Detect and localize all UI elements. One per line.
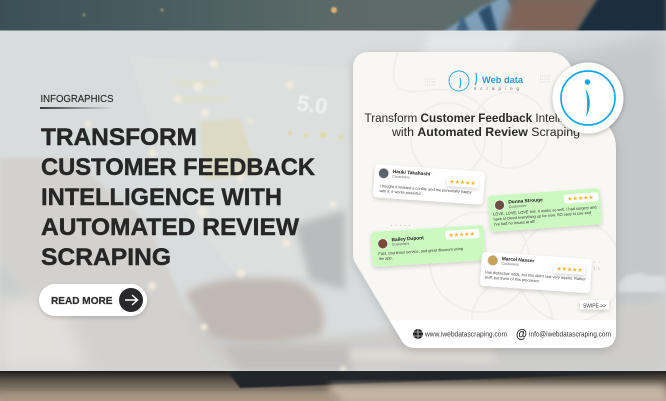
- screen: blurred rating and smiley: Satisfaction: [178, 94, 229, 104]
- review card: Haubi Takahashi: [373, 164, 485, 205]
- icon: arrow: [119, 288, 143, 312]
- review card: Marcel Nasser: Marcel Nasser: [502, 256, 535, 264]
- review card: Donna Strouge: Customers: [509, 204, 526, 209]
- review card: Bailey Dupont: Customers: [392, 242, 410, 247]
- button: read more: READ MORE: [51, 295, 112, 307]
- footer: website: [413, 329, 507, 339]
- review card: Haubi Takahashi: Hauki Takahashi: [393, 169, 430, 178]
- dot grids: [425, 76, 550, 85]
- swipe tag: [580, 300, 609, 310]
- button: read more: [39, 284, 147, 316]
- logo badge circle: [552, 62, 624, 134]
- review card: Donna Strouge: LOVE, LOVE, LOVE this. It works so well. I had surgery and: [493, 204, 597, 217]
- footer: email: [516, 326, 611, 341]
- review card: Haubi Takahashi: I bought it insisted a cordite and me personally happy: [380, 183, 472, 194]
- review card: Donna Strouge: have to bleed everything up for now. SO easy to use and: [493, 210, 591, 222]
- review card: Donna Strouge: ★★★★★: [567, 194, 594, 203]
- review card: Marcel Nasser: ★★★★★: [556, 265, 583, 274]
- main heading: CUSTOMER FEEDBACK: [41, 154, 315, 181]
- review card: Bailey Dupont: Fast, courteous service, and great discount using: [378, 246, 463, 256]
- screen: blurred rating and smiley: [172, 78, 327, 114]
- background photo: bottom band: [0, 368, 666, 401]
- main heading: SCRAPING: [41, 244, 171, 271]
- footer: email: info@iwebdatascraping.com: [529, 332, 611, 338]
- card title: Transform Customer Feedback Intelligence: [364, 113, 594, 125]
- eyebrow: INFOGRAPHICS: [40, 93, 114, 109]
- logo: Web data: [482, 75, 524, 86]
- review card: Donna Strouge: Donna Strouge: [508, 197, 543, 206]
- logo: [449, 71, 524, 91]
- icon: globe: [413, 329, 423, 339]
- review card: Bailey Dupont: ★★★★★: [448, 231, 475, 239]
- card title: with Automated Review Scraping: [391, 127, 580, 139]
- footer bar: [390, 320, 616, 348]
- review card: Marcel Nasser: Customers: [501, 262, 519, 267]
- review card: Haubi Takahashi: ★★★★★: [449, 178, 476, 187]
- review card: Bailey Dupont: [371, 225, 485, 267]
- review card: Marcel Nasser: stuff, but there of this processor.: [484, 274, 540, 283]
- review card: Marcel Nasser: Has distinctive odds, but this didn't last very weeks. Rather: [485, 269, 587, 282]
- footer: website: www.iwebdatascraping.com: [424, 332, 507, 338]
- main heading: AUTOMATED REVIEW: [41, 214, 300, 241]
- logo: scraping: [474, 86, 519, 91]
- review card: Haubi Takahashi: with it, it works powerful.: [379, 188, 422, 196]
- bokeh lights: [84, 60, 346, 372]
- review card: Haubi Takahashi: Customers: [392, 174, 410, 180]
- screen: blurred rating and smiley: Customer: [172, 78, 219, 89]
- panel: social post card: [353, 52, 622, 360]
- review card: Bailey Dupont: Bailey Dupont: [391, 235, 424, 243]
- screen: blurred rating and smiley: 5.0: [295, 90, 329, 119]
- review card: Bailey Dupont: the app.: [379, 255, 393, 261]
- footer: email: @: [516, 326, 527, 341]
- main heading: [41, 124, 315, 271]
- eyebrow: INFOGRAPHICS: INFOGRAPHICS: [40, 93, 114, 105]
- card title: [364, 113, 594, 139]
- review card: Donna Strouge: I've had no issues at all!: [494, 219, 535, 227]
- review card: Marcel Nasser: [480, 252, 592, 293]
- main heading: TRANSFORM: [41, 124, 197, 151]
- swipe tag: SWIPE >>: [583, 304, 607, 310]
- background photo: top band: [0, 0, 666, 30]
- review card: Donna Strouge: [488, 188, 602, 232]
- main heading: INTELLIGENCE WITH: [41, 184, 282, 211]
